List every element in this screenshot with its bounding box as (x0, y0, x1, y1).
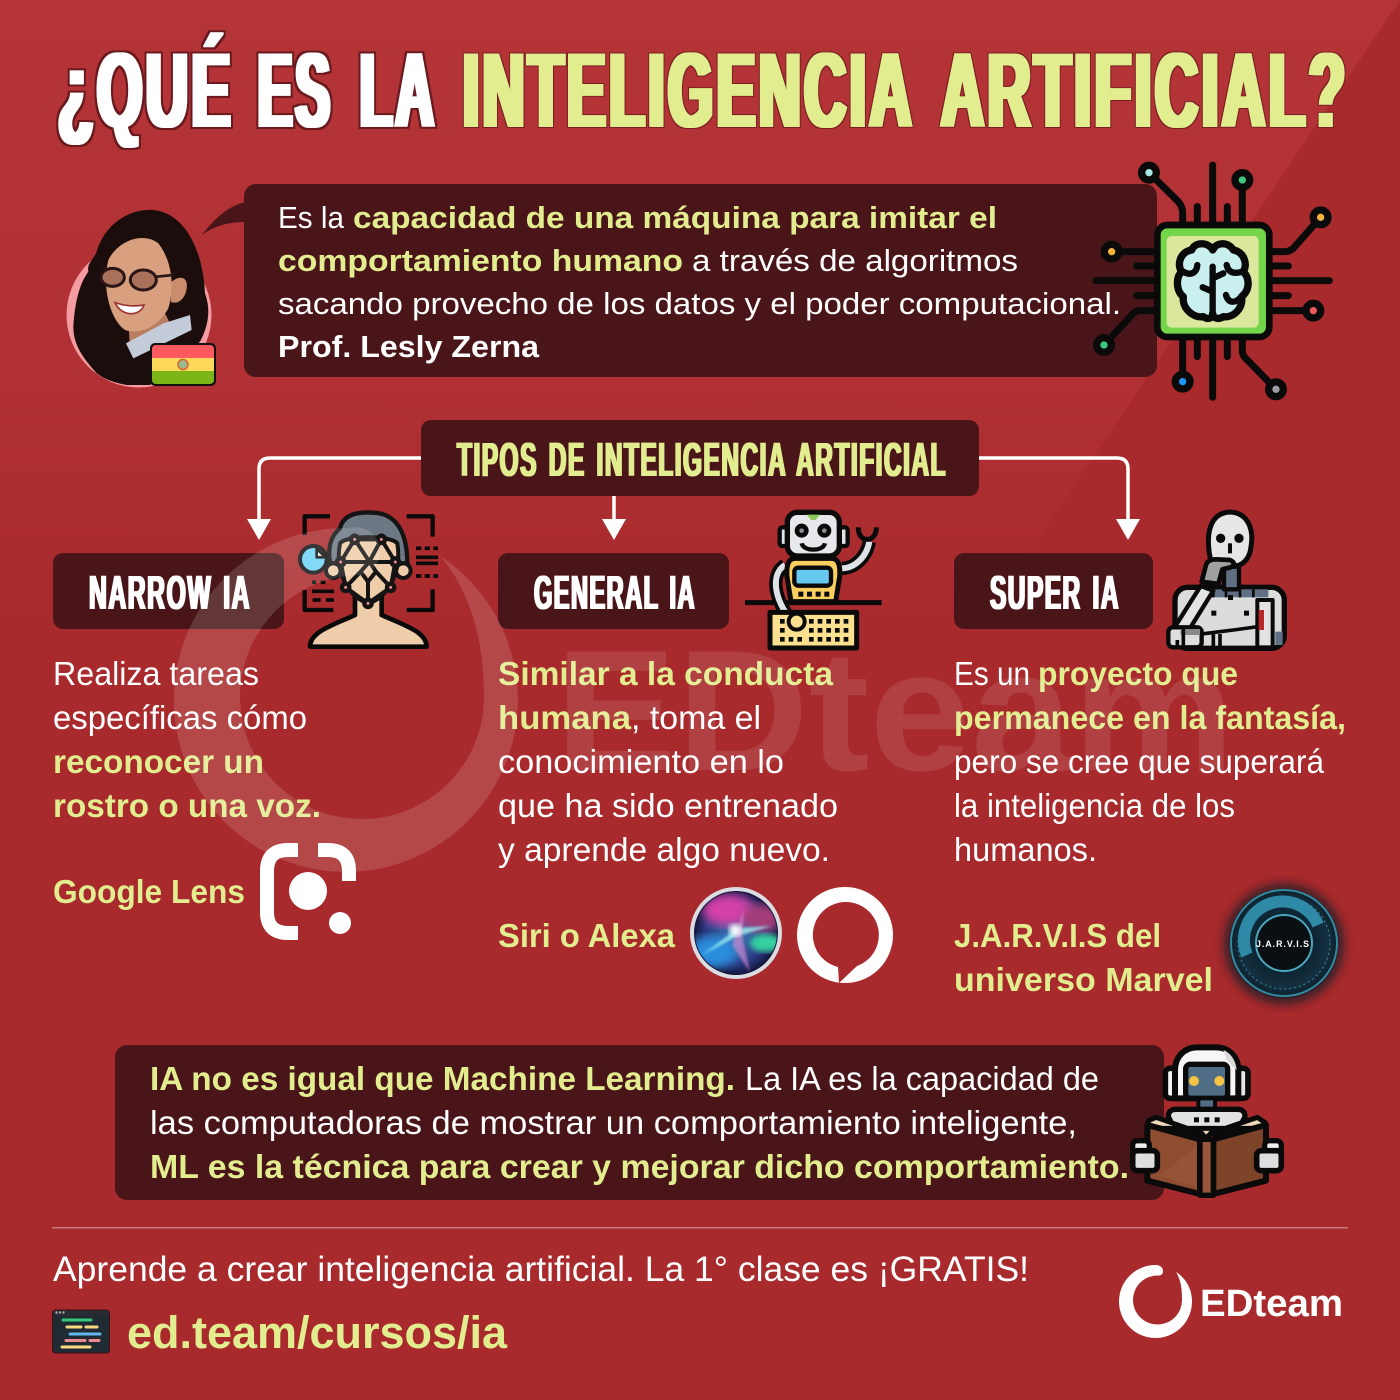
course link: ed.team/cursos/ia (127, 1307, 508, 1358)
description text: pero se cree que superará (954, 743, 1325, 780)
watermark: EDteam: EDteam (555, 615, 1235, 807)
label: Super IA (954, 553, 1153, 629)
description text: la inteligencia de los (954, 787, 1235, 824)
quote text (278, 200, 1121, 364)
divider (52, 1227, 1348, 1228)
label: General IA (498, 553, 729, 629)
quote text: comportamiento humano (278, 243, 683, 278)
description text: y aprende algo nuevo. (498, 831, 830, 868)
title: INTELIGENCIA (463, 30, 915, 150)
description text: permanece en la fantasía, (954, 699, 1346, 736)
description text: que ha sido entrenado (498, 787, 838, 824)
description text: , toma el (631, 699, 761, 736)
arrow: to General IA (602, 496, 626, 540)
panel: General IA (498, 512, 893, 983)
example: Google Lens: Google Lens (53, 873, 245, 910)
description text: específicas cómo (53, 699, 307, 736)
callout: IA vs Machine Learning (115, 1045, 1164, 1200)
arrow: to Super IA (979, 458, 1140, 540)
callout text: ML es la técnica para crear y mejorar dicho comportamiento. (150, 1148, 1129, 1185)
description text: humana (498, 699, 632, 736)
description text (53, 655, 321, 824)
icon: robot at keyboard (745, 512, 882, 648)
panel: Narrow IA (53, 512, 438, 934)
call to action text: Aprende a crear inteligencia artificial. La 1° clase es ¡GRATIS! (53, 1250, 1029, 1289)
icon: JARVIS (1226, 886, 1342, 1002)
example: JARVIS (954, 917, 1213, 998)
icon: Siri (686, 887, 782, 979)
icon: face recognition (300, 512, 438, 647)
heading: types of AI: TIPOS DE INTELIGENCIA ARTIFICIAL (457, 434, 947, 487)
callout text: IA no es igual que Machine Learning. (150, 1060, 735, 1097)
icon: code window (52, 1310, 110, 1353)
logo: EDteam: EDteam (1200, 1283, 1343, 1325)
label: Super IA: SUPER IA (990, 567, 1120, 620)
description text: conocimiento en lo (498, 743, 784, 780)
flag of Bolivia (150, 343, 216, 386)
description text: Es un (954, 655, 1030, 692)
description text: proyecto que (1038, 655, 1238, 692)
quote panel (202, 184, 1157, 377)
label: General IA: GENERAL IA (534, 567, 696, 620)
logo: EDteam (1119, 1265, 1343, 1338)
heading: types of AI (421, 420, 979, 496)
description text: Realiza tareas (53, 655, 259, 692)
example: JARVIS: J.A.R.V.I.S del (954, 917, 1161, 954)
quote text: capacidad de una máquina para imitar el (353, 200, 997, 235)
title: LA (360, 30, 437, 150)
icon: thinking humanoid (1168, 512, 1284, 648)
icon: JARVIS: J.A.R.V.I.S (1256, 939, 1310, 949)
title (58, 30, 1349, 150)
watermark: EDteam (174, 527, 1235, 872)
quote text: sacando provecho de los datos y el poder computacional. (278, 286, 1121, 321)
description text: reconocer un (53, 743, 264, 780)
icon: AI chip with brain (1096, 165, 1329, 397)
description text (954, 655, 1346, 868)
callout text: las computadoras de mostrar un comportamiento inteligente, (150, 1104, 1077, 1141)
description text: Similar a la conducta (498, 655, 834, 692)
label: Narrow IA (53, 553, 284, 629)
example: Siri or Alexa: Siri o Alexa (498, 917, 676, 954)
callout text (150, 1060, 1129, 1185)
title: ES (258, 30, 333, 150)
quote text: a través de algoritmos (692, 243, 1018, 278)
panel: Super IA (954, 512, 1346, 1002)
description text (498, 655, 838, 868)
icon: Alexa (797, 887, 893, 983)
icon: Google Lens (267, 850, 351, 934)
label: Narrow IA: NARROW IA (89, 567, 251, 620)
arrow: to Narrow IA (247, 458, 421, 540)
icon: robot reading a book (1133, 1047, 1281, 1195)
title: ¿QUÉ (58, 30, 234, 150)
description text: rostro o una voz. (53, 787, 321, 824)
quote text: Es la (278, 200, 345, 235)
description text: humanos. (954, 831, 1097, 868)
example: JARVIS: universo Marvel (954, 961, 1213, 998)
portrait: Prof. Lesly Zerna (66, 210, 212, 388)
callout text: La IA es la capacidad de (745, 1060, 1099, 1097)
quote text: Prof. Lesly Zerna (278, 329, 540, 364)
